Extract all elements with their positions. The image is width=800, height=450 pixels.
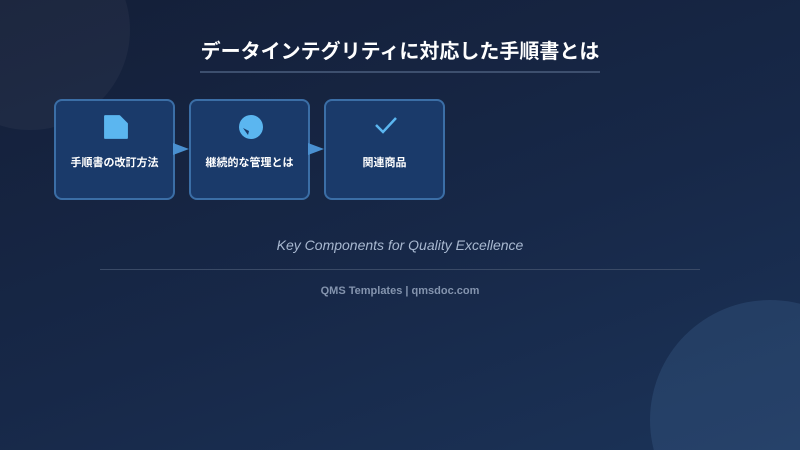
card 3: 関連商品 — [362, 157, 406, 169]
card 1 — [54, 99, 175, 200]
icon: document — [104, 115, 128, 139]
icon: circle — [239, 115, 263, 139]
card 2 — [189, 99, 310, 200]
arrow 1 — [173, 143, 189, 155]
card 1: 手順書の改訂方法 — [70, 157, 158, 169]
arrow 2 — [308, 143, 324, 155]
card 2: 継続的な管理とは — [206, 157, 294, 169]
subtitle: Key Components for Quality Excellence — [277, 237, 523, 253]
icon: check — [375, 117, 397, 134]
footer: QMS Templates | qmsdoc.com — [321, 285, 479, 297]
card 3 — [324, 99, 445, 200]
title: データインテグリティに対応した手順書とは — [201, 41, 599, 63]
